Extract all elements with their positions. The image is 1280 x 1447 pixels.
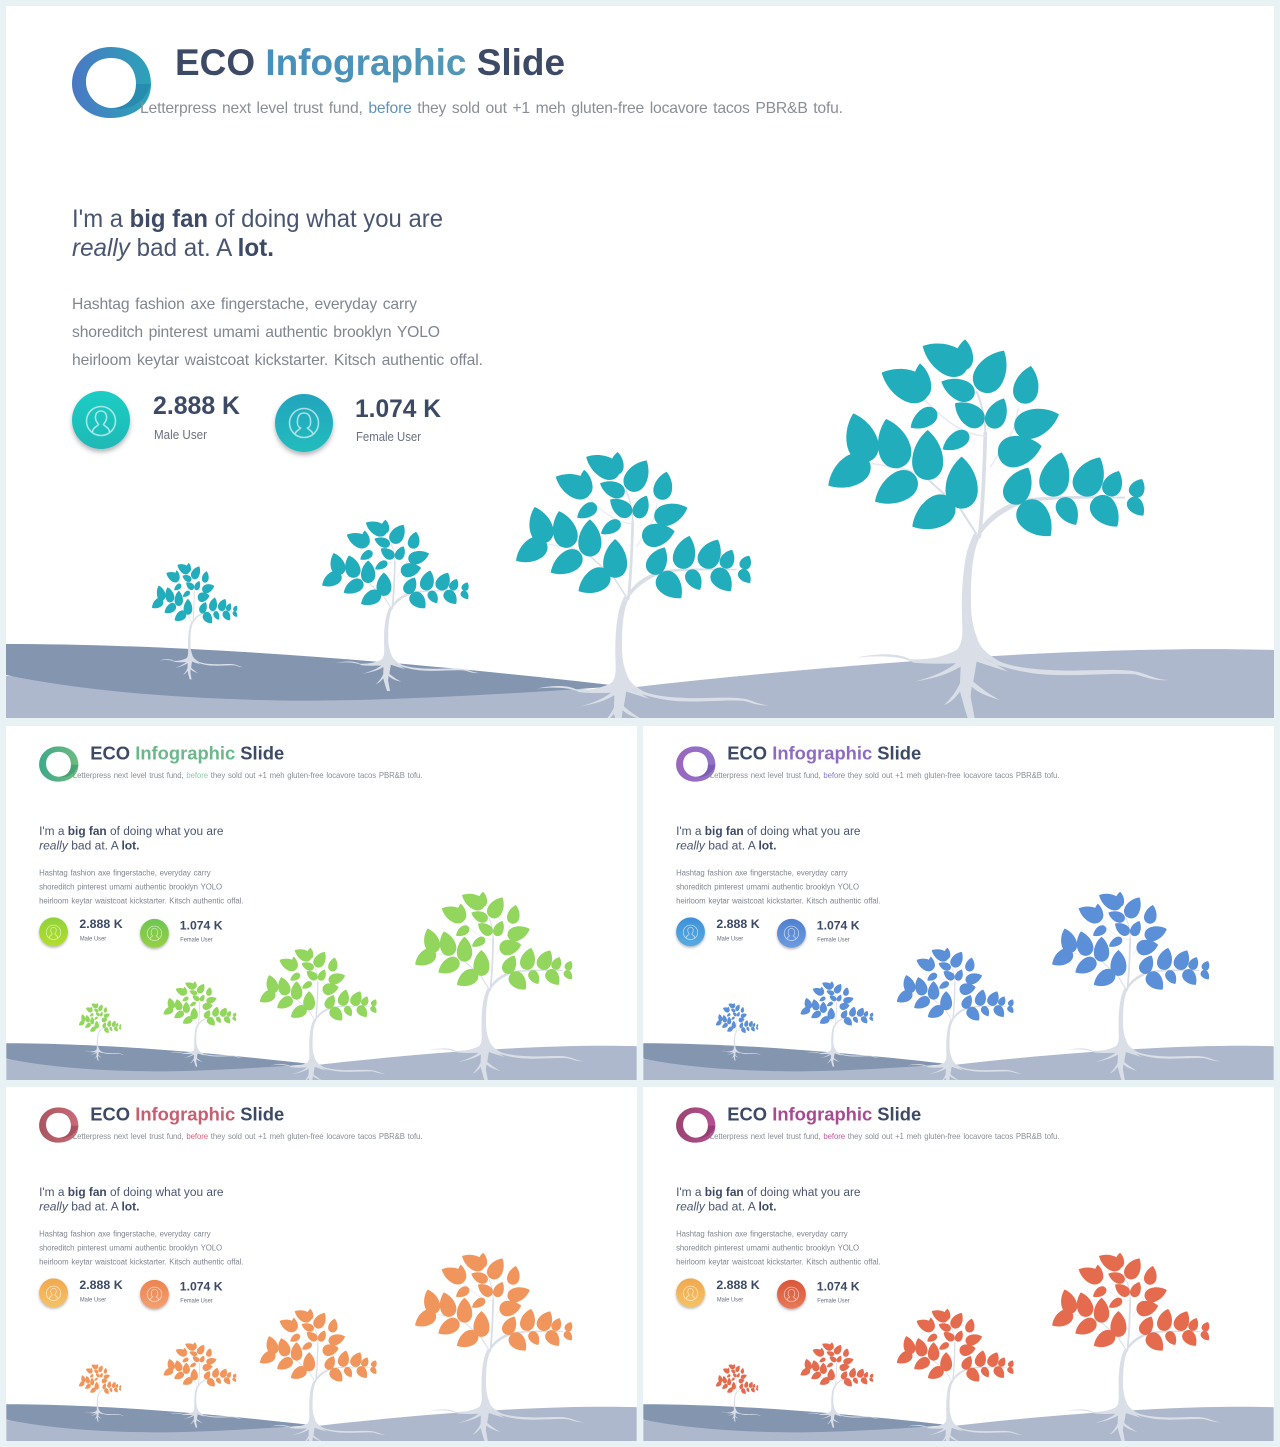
- tree: stage 4: [1048, 1250, 1221, 1442]
- heading: I'm a big fan of doing what you are: [39, 824, 224, 838]
- heading: [676, 1185, 861, 1213]
- subtitle: Letterpress next level trust fund, before they sold out +1 meh gluten-free locavore tacos PBR&B tofu.: [710, 1132, 1059, 1141]
- stat: female user: Female User: [817, 1297, 850, 1304]
- heading: [39, 824, 224, 852]
- title: ECO Infographic Slide: [90, 742, 284, 763]
- title: ECO Infographic Slide: [727, 742, 921, 763]
- subtitle: Letterpress next level trust fund, before they sold out +1 meh gluten-free locavore tacos PBR&B tofu.: [73, 1132, 422, 1141]
- heading: really bad at. A lot.: [676, 1199, 777, 1213]
- stat: male user: [39, 1278, 123, 1307]
- stat: female user: 1.074 K: [817, 1279, 860, 1293]
- body text: shoreditch pinterest umami authentic brooklyn YOLO: [39, 883, 222, 892]
- stat: female user: [777, 918, 860, 948]
- heading: [39, 1185, 224, 1213]
- tree: stage 4: [411, 889, 584, 1081]
- body text: heirloom keytar waistcoat kickstarter. Kitsch authentic offal.: [39, 1257, 243, 1266]
- stat: male user: Male User: [717, 935, 743, 942]
- body text: shoreditch pinterest umami authentic brooklyn YOLO: [72, 324, 440, 341]
- body text: [676, 869, 880, 905]
- icon: ring logo: [72, 47, 151, 118]
- panel: red slide: [643, 1087, 1274, 1441]
- stat: female user: Female User: [356, 430, 421, 444]
- stat: female user: 1.074 K: [817, 918, 860, 932]
- icon: ring logo: [39, 1107, 78, 1143]
- tree: stage 2: [799, 1341, 879, 1428]
- tree: stage 1: [150, 561, 244, 679]
- ground hills: [6, 1404, 637, 1441]
- body text: Hashtag fashion axe fingerstache, everyday carry: [676, 869, 848, 878]
- title: ECO Infographic Slide: [90, 1103, 284, 1124]
- body text: Hashtag fashion axe fingerstache, everyday carry: [39, 869, 211, 878]
- stat: male user: [72, 391, 240, 449]
- title: ECO Infographic Slide: [175, 42, 565, 83]
- heading: [676, 824, 861, 852]
- body text: shoreditch pinterest umami authentic brooklyn YOLO: [39, 1244, 222, 1253]
- body text: [72, 296, 483, 369]
- stat: male user: [676, 1278, 760, 1307]
- subtitle: Letterpress next level trust fund, before they sold out +1 meh gluten-free locavore tacos PBR&B tofu.: [73, 771, 422, 780]
- ground hills: [6, 1043, 637, 1080]
- tree: stage 2: [162, 980, 242, 1067]
- panel: green slide: [6, 726, 637, 1080]
- heading: really bad at. A lot.: [72, 234, 274, 262]
- subtitle: Letterpress next level trust fund, before they sold out +1 meh gluten-free locavore tacos PBR&B tofu.: [710, 771, 1059, 780]
- body text: shoreditch pinterest umami authentic brooklyn YOLO: [676, 1244, 859, 1253]
- heading: I'm a big fan of doing what you are: [676, 824, 861, 838]
- stat: female user: 1.074 K: [180, 918, 223, 932]
- stat: male user: 2.888 K: [716, 1278, 760, 1292]
- tree: stage 2: [162, 1341, 242, 1428]
- heading: really bad at. A lot.: [39, 838, 140, 852]
- tree: stage 3: [510, 447, 769, 735]
- body text: [676, 1230, 880, 1266]
- tree: stage 3: [894, 1306, 1022, 1447]
- body text: [39, 869, 243, 905]
- body text: heirloom keytar waistcoat kickstarter. Kitsch authentic offal.: [676, 896, 880, 905]
- body text: shoreditch pinterest umami authentic brooklyn YOLO: [676, 883, 859, 892]
- stat: female user: [777, 1279, 860, 1309]
- stat: female user: 1.074 K: [180, 1279, 223, 1293]
- body text: Hashtag fashion axe fingerstache, everyday carry: [39, 1230, 211, 1239]
- stat: male user: [676, 917, 760, 946]
- subtitle: Letterpress next level trust fund, before they sold out +1 meh gluten-free locavore tacos PBR&B tofu.: [140, 100, 843, 117]
- heading: [72, 205, 443, 262]
- tree: stage 1: [715, 1363, 761, 1422]
- tree: stage 4: [411, 1250, 584, 1442]
- stat: male user: 2.888 K: [79, 1278, 123, 1292]
- body text: heirloom keytar waistcoat kickstarter. Kitsch authentic offal.: [39, 896, 243, 905]
- heading: really bad at. A lot.: [676, 838, 777, 852]
- heading: I'm a big fan of doing what you are: [72, 205, 443, 233]
- ground hills: [643, 1043, 1274, 1080]
- icon: ring logo: [676, 1107, 715, 1143]
- stat: female user: [140, 918, 223, 948]
- panel: orange slide: [6, 1087, 637, 1441]
- heading: really bad at. A lot.: [39, 1199, 140, 1213]
- stat: male user: Male User: [80, 1296, 106, 1303]
- stat: male user: [39, 917, 123, 946]
- heading: I'm a big fan of doing what you are: [39, 1185, 224, 1199]
- stat: female user: [275, 394, 441, 452]
- stat: female user: Female User: [180, 936, 213, 943]
- tree: stage 2: [318, 517, 480, 691]
- ground hills: [643, 1404, 1274, 1441]
- tree: stage 3: [257, 945, 385, 1088]
- stat: female user: Female User: [817, 936, 850, 943]
- stat: female user: Female User: [180, 1297, 213, 1304]
- stat: male user: 2.888 K: [153, 392, 240, 420]
- tree: stage 3: [257, 1306, 385, 1447]
- icon: ring logo: [676, 746, 715, 782]
- tree: stage 1: [715, 1002, 761, 1061]
- tree: stage 4: [820, 333, 1168, 720]
- stat: female user: 1.074 K: [355, 395, 441, 423]
- tree: stage 4: [1048, 889, 1221, 1081]
- body text: heirloom keytar waistcoat kickstarter. Kitsch authentic offal.: [676, 1257, 880, 1266]
- stat: male user: 2.888 K: [716, 917, 760, 931]
- stat: female user: [140, 1279, 223, 1309]
- stat: male user: 2.888 K: [79, 917, 123, 931]
- panel: main teal slide: [6, 6, 1274, 718]
- body text: heirloom keytar waistcoat kickstarter. Kitsch authentic offal.: [72, 352, 483, 369]
- heading: I'm a big fan of doing what you are: [676, 1185, 861, 1199]
- tree: stage 1: [78, 1363, 124, 1422]
- stat: male user: Male User: [80, 935, 106, 942]
- tree: stage 2: [799, 980, 879, 1067]
- tree: stage 1: [78, 1002, 124, 1061]
- stat: male user: Male User: [154, 428, 207, 442]
- body text: [39, 1230, 243, 1266]
- stat: male user: Male User: [717, 1296, 743, 1303]
- body text: Hashtag fashion axe fingerstache, everyday carry: [676, 1230, 848, 1239]
- title: ECO Infographic Slide: [727, 1103, 921, 1124]
- tree: stage 3: [894, 945, 1022, 1088]
- icon: ring logo: [39, 746, 78, 782]
- ground hills: [6, 644, 1274, 718]
- body text: Hashtag fashion axe fingerstache, everyday carry: [72, 296, 417, 313]
- panel: blue slide: [643, 726, 1274, 1080]
